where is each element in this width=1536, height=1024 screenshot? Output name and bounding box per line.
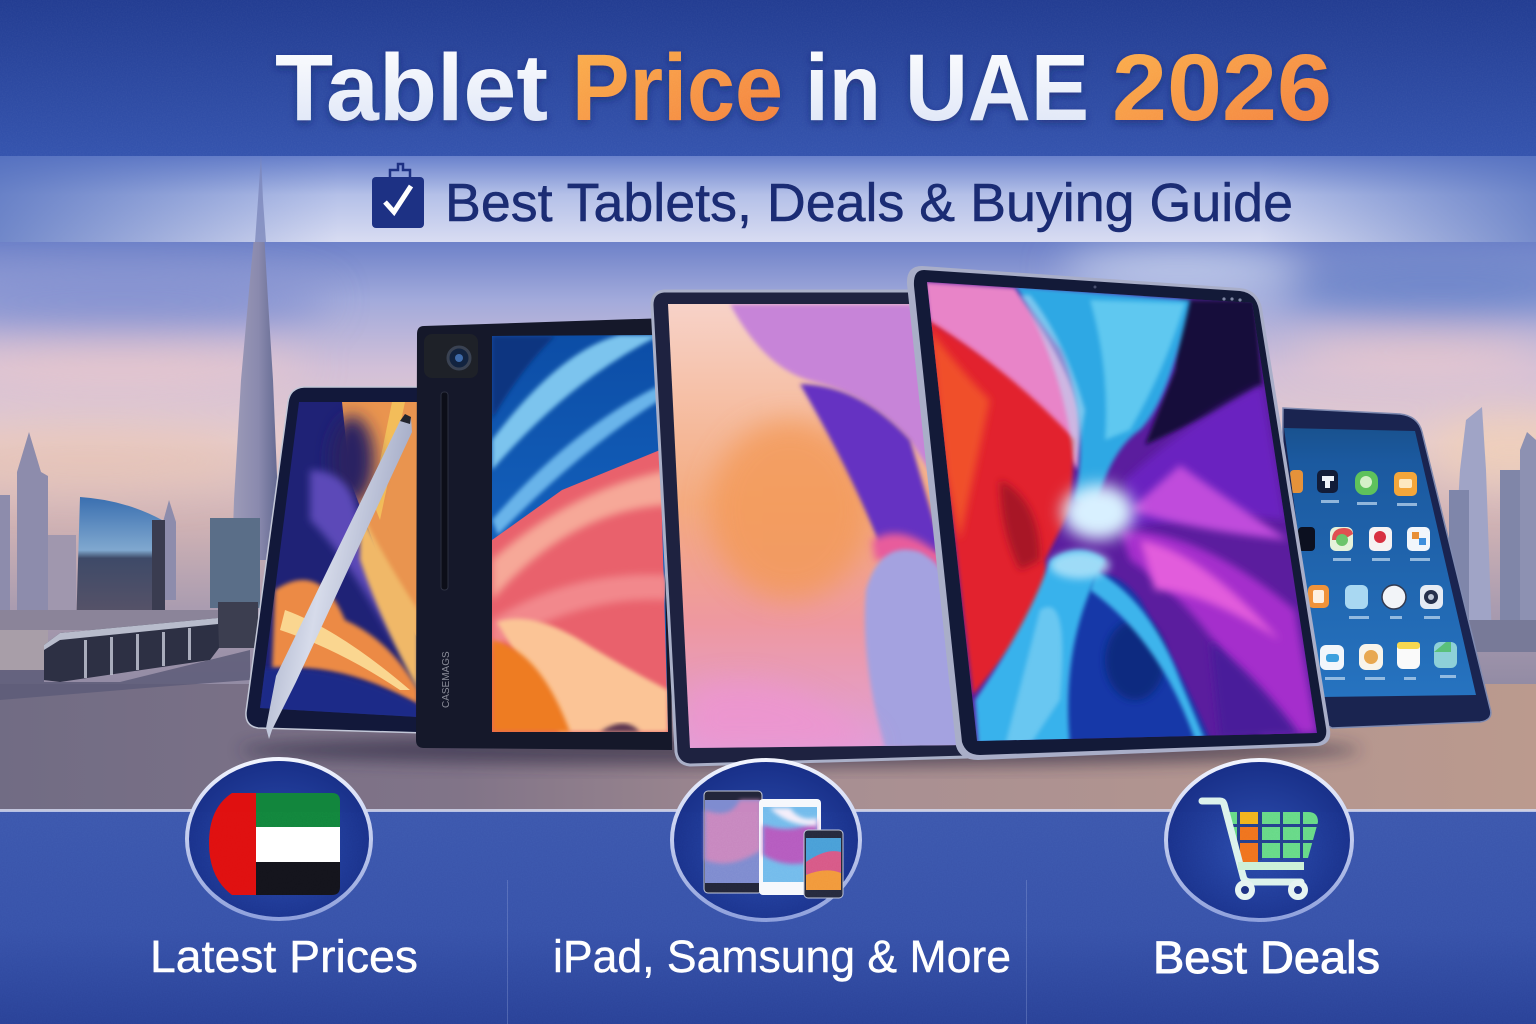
screen: light blue: [1015, 286, 1190, 510]
subtitle: Best Tablets, Deals & Buying Guide: [445, 173, 1293, 233]
grain texture: bottom: [0, 812, 1536, 1024]
Burj Khalifa top over band: [255, 155, 266, 242]
tablet 4: front large: [907, 266, 1330, 760]
title: Price: [572, 35, 783, 141]
tablet 5: right app grid: [1280, 408, 1491, 728]
icon: shopping cart badge: [1166, 760, 1352, 920]
header band: [0, 0, 1536, 156]
title: in: [805, 35, 881, 141]
title: UAE: [905, 35, 1089, 141]
icon: devices badge: [672, 760, 860, 920]
label: iPad, Samsung & More: [553, 931, 1011, 982]
title: 2026: [1112, 35, 1332, 141]
subtitle band: [0, 156, 1536, 242]
background: ground: [0, 684, 1536, 812]
tablet 1: left with stylus: [246, 387, 425, 739]
background: clouds: [0, 250, 1536, 490]
icon: Burj Khalifa tower: [232, 155, 280, 560]
title: Tablet: [275, 35, 548, 141]
screen: magenta flow: [1120, 530, 1317, 735]
grain texture: top: [0, 0, 1536, 156]
skyline left: [0, 155, 280, 700]
bottom panel: [0, 759, 1536, 1024]
feature: best deals: [1153, 760, 1380, 983]
icon: UAE flag badge: [187, 759, 371, 919]
background: sky: [0, 230, 1536, 710]
screen: centre glow: [1062, 484, 1134, 540]
skyline right: [1449, 407, 1536, 652]
feature: devices: [553, 760, 1011, 982]
icon: stylus: [266, 414, 412, 739]
screen: pink: [925, 282, 1080, 470]
building: blue glass tower: [76, 497, 165, 630]
tablet 2: black case: [416, 318, 672, 750]
label: Best Deals: [1153, 932, 1380, 983]
screen: deep blue: [1060, 573, 1210, 745]
tablet 2: black case: CASEMAGS: [441, 651, 452, 708]
screen: purple highlights: [1125, 385, 1285, 530]
screen: dark corner: [1145, 300, 1262, 445]
icon: camera module: [424, 334, 478, 378]
building: low block: [44, 618, 219, 682]
icon: clipboard check: [372, 164, 424, 228]
camera dots: [1094, 286, 1096, 288]
feature: latest prices: [150, 759, 418, 982]
screen: bright blue flow: [975, 550, 1105, 745]
title: [275, 35, 1332, 141]
tablet 3: pastel: [652, 291, 966, 765]
screen: red: [928, 320, 1075, 695]
label: Latest Prices: [150, 931, 418, 982]
tablet shadow: [240, 734, 1360, 766]
